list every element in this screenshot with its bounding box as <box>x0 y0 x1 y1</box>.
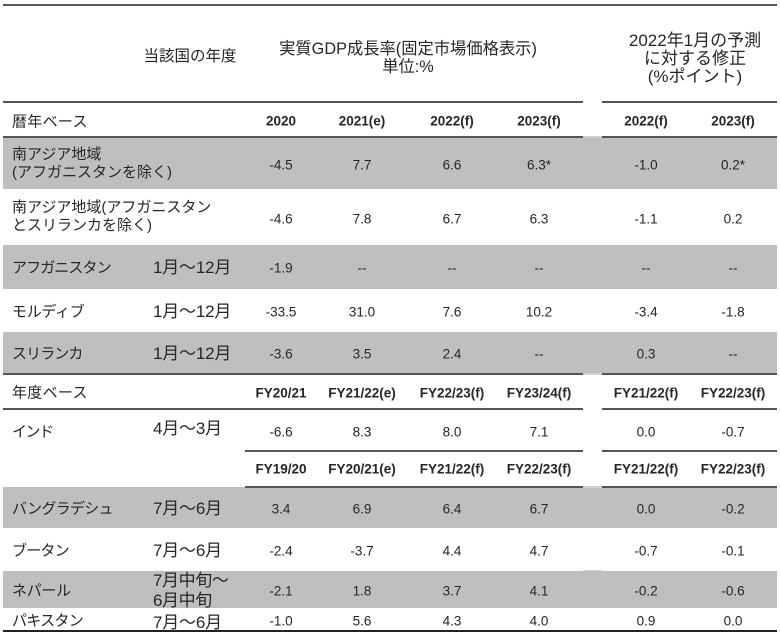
header row: calendar year basis: 暦年ベース <box>12 114 88 130</box>
row: Sri Lanka: 0.3 <box>637 346 655 361</box>
header row: second fiscal year set: FY20/21(e) <box>328 461 396 476</box>
row: Bhutan: 7月～6月 <box>153 541 222 560</box>
row: Maldives: 10.2 <box>526 304 552 319</box>
row: South Asia excluding Afghanistan: 6.3* <box>527 157 551 172</box>
row: Pakistan <box>12 612 742 632</box>
row: Bhutan: -0.7 <box>634 543 658 558</box>
row: Bangladesh: -0.2 <box>721 501 745 516</box>
row: South Asia excluding Afghanistan: 0.2* <box>721 157 745 172</box>
heading: real GDP growth rate <box>279 40 537 76</box>
heading: revision to January 2022 forecast: (%ポイント) <box>648 67 742 86</box>
heading: revision to January 2022 forecast <box>629 31 761 86</box>
row: Bangladesh: 6.7 <box>530 501 548 516</box>
heading: real GDP growth rate: 単位:% <box>382 58 434 76</box>
header row: second fiscal year set: FY21/22(f) <box>420 461 484 476</box>
row: Nepal: 1.8 <box>353 583 371 598</box>
row: India: 4月～3月 <box>153 419 222 438</box>
row: India: 8.3 <box>353 424 371 439</box>
heading: revision to January 2022 forecast: 2022年1月の予測 <box>629 31 761 50</box>
row: Afghanistan: アフガニスタン <box>12 260 111 276</box>
row: Bangladesh: 7月～6月 <box>153 498 222 518</box>
row: Nepal: -2.1 <box>269 583 293 598</box>
row: Bangladesh: 3.4 <box>272 501 290 516</box>
row: Bangladesh: 6.4 <box>443 501 461 516</box>
row: India: -6.6 <box>269 424 293 439</box>
row: Afghanistan: -- <box>534 260 544 275</box>
row: South Asia excluding Afghanistan: -4.5 <box>269 157 293 172</box>
row: Bhutan: -3.7 <box>350 543 374 558</box>
row: Nepal <box>3 570 777 610</box>
row: Nepal: 4.1 <box>530 583 548 598</box>
row: Afghanistan: -- <box>358 260 366 275</box>
header row: fiscal year basis: FY21/22(f) <box>614 385 678 400</box>
row: Bhutan: -0.1 <box>721 543 745 558</box>
row: Maldives <box>12 302 745 320</box>
row: Pakistan: 4.3 <box>443 613 461 628</box>
header row: second fiscal year set: FY21/22(f) <box>614 461 678 476</box>
row: Bangladesh: バングラデシュ <box>12 500 113 517</box>
row: Nepal: -0.6 <box>721 583 745 598</box>
row: Maldives: 31.0 <box>349 304 375 319</box>
header row: fiscal year basis: FY21/22(e) <box>328 385 396 400</box>
header row: calendar year basis: 2022(f) <box>430 113 474 128</box>
row: South Asia excluding Afghanistan and Sri Lanka: 南アジア地域(アフガニスタン <box>12 199 211 216</box>
row: South Asia excluding Afghanistan: 6.6 <box>443 157 461 172</box>
header row: fiscal year basis: 年度ベース <box>12 384 88 401</box>
header row: calendar year basis <box>12 113 755 130</box>
heading: fiscal year of country: 当該国の年度 <box>143 48 237 65</box>
row: Pakistan: 5.6 <box>353 613 371 628</box>
header row: calendar year basis: 2023(f) <box>517 113 561 128</box>
row: Maldives: -1.8 <box>721 304 745 319</box>
header row: second fiscal year set: FY22/23(f) <box>507 461 571 476</box>
row: Nepal: 3.7 <box>443 583 461 598</box>
row: Bangladesh <box>3 487 777 528</box>
row: Afghanistan <box>3 245 777 289</box>
header row: calendar year basis: 2023(f) <box>711 113 755 128</box>
row: South Asia excluding Afghanistan and Sri Lanka <box>12 199 742 234</box>
row: India: 7.1 <box>530 424 548 439</box>
row: Afghanistan: -- <box>642 260 650 275</box>
row: South Asia excluding Afghanistan and Sri Lanka: 6.7 <box>443 211 461 226</box>
header row: fiscal year basis: FY20/21 <box>255 385 307 400</box>
row: India <box>12 419 745 440</box>
header row: fiscal year basis: FY22/23(f) <box>701 385 765 400</box>
row: Sri Lanka <box>3 332 777 373</box>
row: Afghanistan: -- <box>728 260 738 275</box>
row: Nepal: 6月中旬 <box>153 590 212 610</box>
header row: second fiscal year set: FY22/23(f) <box>701 461 765 476</box>
header row: fiscal year basis <box>12 384 765 401</box>
row: South Asia excluding Afghanistan <box>3 138 777 189</box>
row: Pakistan: 7月～6月 <box>153 613 222 632</box>
row: Maldives: -3.4 <box>634 304 658 319</box>
row: Bhutan: 4.4 <box>443 543 461 558</box>
row: South Asia excluding Afghanistan and Sri Lanka: -4.6 <box>269 211 293 226</box>
row: South Asia excluding Afghanistan: 7.7 <box>353 157 371 172</box>
row: Bhutan: -2.4 <box>269 543 293 558</box>
row: Pakistan: パキスタン <box>12 612 83 630</box>
row: India: -0.7 <box>721 424 745 439</box>
header row: calendar year basis: 2022(f) <box>624 113 668 128</box>
row: Afghanistan: 1月～12月 <box>153 258 231 277</box>
row: Maldives: モルディブ <box>12 303 84 320</box>
header row: fiscal year basis: FY22/23(f) <box>420 385 484 400</box>
row: Afghanistan: -1.9 <box>269 260 293 275</box>
row: Bangladesh: 6.9 <box>353 501 371 516</box>
header row: calendar year basis: 2020 <box>266 113 296 128</box>
header row: fiscal year basis: FY23/24(f) <box>507 385 571 400</box>
row: Sri Lanka: -- <box>728 346 738 361</box>
row: South Asia excluding Afghanistan and Sri Lanka: 6.3 <box>530 211 548 226</box>
header row: second fiscal year set <box>255 461 765 476</box>
row: Sri Lanka: 1月～12月 <box>153 344 231 363</box>
row: Bhutan: ブータン <box>12 542 69 560</box>
row: Nepal: 7月中旬～ <box>153 570 228 590</box>
row: Pakistan: -1.0 <box>269 613 293 628</box>
row: Pakistan: 0.0 <box>724 613 742 628</box>
row: South Asia excluding Afghanistan: -1.0 <box>634 157 658 172</box>
row: Bangladesh: 0.0 <box>637 501 655 516</box>
row: Nepal: -0.2 <box>634 583 658 598</box>
row: Afghanistan: -- <box>448 260 456 275</box>
row: Maldives: 7.6 <box>443 304 461 319</box>
heading: revision to January 2022 forecast: に対する修正 <box>644 49 746 68</box>
row: South Asia excluding Afghanistan: (アフガニスタンを除く) <box>12 164 172 181</box>
row: Maldives: -33.5 <box>266 304 296 319</box>
row: Bhutan <box>12 541 745 560</box>
row: India: インド <box>12 423 53 440</box>
row: Pakistan: 4.0 <box>530 613 548 628</box>
row: South Asia excluding Afghanistan and Sri Lanka: 7.8 <box>353 211 371 226</box>
row: Sri Lanka: -3.6 <box>269 346 293 361</box>
row: South Asia excluding Afghanistan and Sri Lanka: とスリランカを除く) <box>12 217 152 234</box>
row: Maldives: 1月～12月 <box>153 302 231 320</box>
row: Pakistan: 0.9 <box>637 613 655 628</box>
header row: calendar year basis: 2021(e) <box>339 113 385 128</box>
row: Sri Lanka: -- <box>534 346 544 361</box>
row: Sri Lanka: 3.5 <box>353 346 371 361</box>
header row: second fiscal year set: FY19/20 <box>255 461 307 476</box>
row: India: 8.0 <box>443 424 461 439</box>
row: South Asia excluding Afghanistan and Sri Lanka: 0.2 <box>724 211 742 226</box>
row: Sri Lanka: 2.4 <box>443 346 461 361</box>
heading: real GDP growth rate: 実質GDP成長率(固定市場価格表示) <box>279 40 537 58</box>
row: South Asia excluding Afghanistan and Sri Lanka: -1.1 <box>634 211 658 226</box>
row: Bhutan: 4.7 <box>530 543 548 558</box>
row: Nepal: ネパール <box>12 582 71 599</box>
row: South Asia excluding Afghanistan: 南アジア地域 <box>12 146 101 163</box>
row: India: 0.0 <box>637 424 655 439</box>
row: Sri Lanka: スリランカ <box>12 346 83 362</box>
